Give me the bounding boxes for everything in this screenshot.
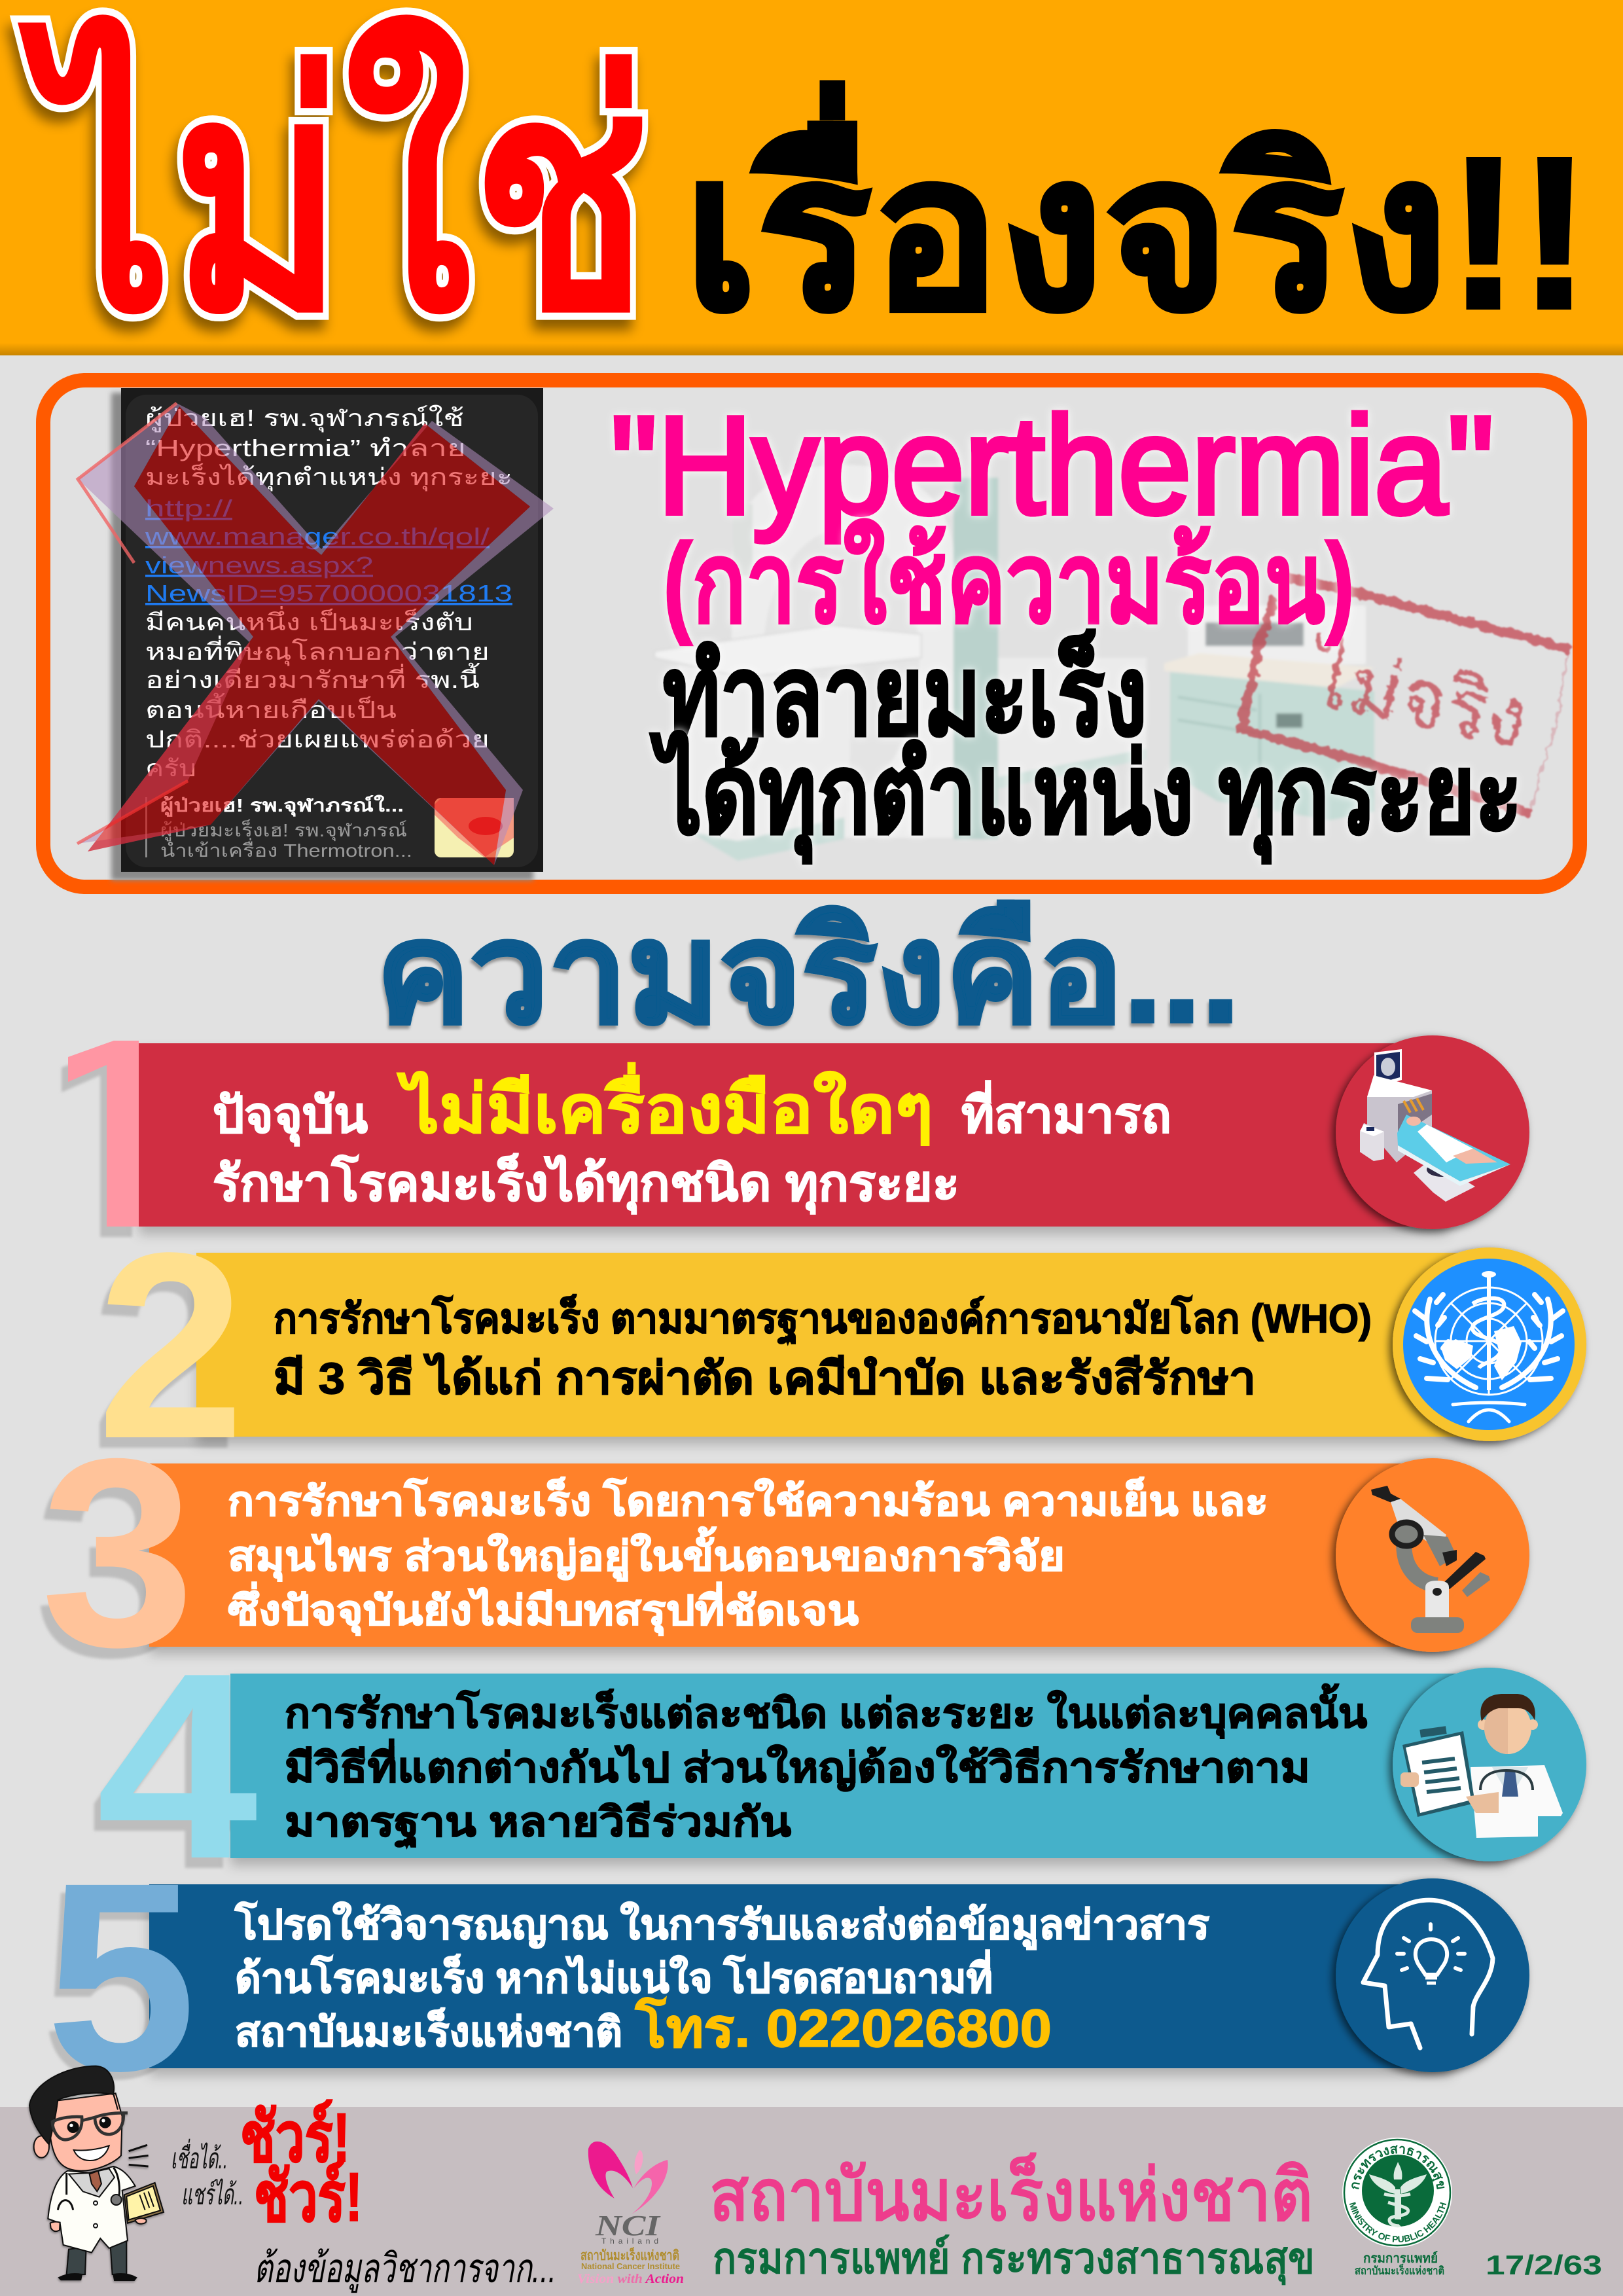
fact 1 text: ที่สามารถ: [961, 1080, 1171, 1143]
subhead: use of heat: (การใช้ความร้อน): [663, 519, 1355, 646]
title: true story: เรื่องจริง!!: [684, 82, 1590, 353]
icon: microscope: [1336, 1458, 1529, 1652]
caption: academic info from: ต้องข้อมูลวิชาการจาก...: [254, 2246, 556, 2293]
seal caption: สถาบันมะเร็งแห่งชาติ: [1355, 2263, 1444, 2277]
header band: [0, 0, 1623, 376]
phone screenshot of chat message: “Hyperthermia” ทำลาย: [145, 435, 466, 461]
fact 5 text: สถาบันมะเร็งแห่งชาติ: [235, 2007, 622, 2055]
icon: head with lightbulb: [1336, 1878, 1529, 2072]
phone screenshot of chat message: [111, 388, 543, 880]
logo: National Cancer Institute: NCI: [595, 2210, 661, 2242]
icon: doctor with clipboard: [1393, 1668, 1586, 1861]
faded photo: radiotherapy machine: [654, 465, 1374, 861]
number 5: 5: [46, 1827, 196, 2126]
caption: believable: เชื่อได้..: [171, 2138, 228, 2175]
fact 1: [39, 984, 1529, 1283]
fact 3 text: [228, 1477, 1268, 1636]
icon: MRI scanner: [1336, 1035, 1529, 1229]
fact 5: 5: [41, 1835, 191, 2134]
heading: the truth is: ความจริงคือ...: [376, 894, 1240, 1052]
seal caption: กรมการแพทย์: [1363, 2251, 1438, 2266]
fact 3: 3: [34, 1413, 188, 1713]
red stamp: not true: [1241, 579, 1567, 813]
phone screenshot of chat message: มีคนคนหนึ่ง เป็นมะเร็งตับ: [145, 606, 473, 636]
logo: Ministry of Public Health seal: MINISTRY OF PUBLIC HEALTH: [1349, 2202, 1446, 2242]
fact 5: [41, 1827, 1529, 2134]
fact 1 text: ไม่มีเครื่องมือใดๆ: [397, 1062, 933, 1147]
fact 4 text: มาตรฐาน หลายวิธีร่วมกัน: [285, 1800, 791, 1848]
phone screenshot of chat message: หมอที่พิษณุโลกบอกว่าตาย: [145, 636, 490, 666]
red X over screenshot: [77, 403, 554, 865]
phone screenshot of chat message: ผู้ป่วยมะเร็งเฮ! รพ.จุฬาภรณ์: [160, 819, 407, 842]
claim line 1: ทำลายมะเร็ง: [663, 630, 1147, 759]
fact 4: [90, 1617, 1586, 1924]
fact 2: [90, 1197, 1586, 1504]
icon: WHO emblem: [1393, 1247, 1586, 1441]
fact 4 text: การรักษาโรคมะเร็งแต่ละชนิด แต่ละระยะ ในแต่ละบุคคลนั้น: [285, 1683, 1367, 1738]
phone screenshot of chat message: มะเร็งได้ทุกตำแหน่ง ทุกระยะ: [145, 462, 512, 492]
fact 2 text: มี 3 วิธี ได้แก่ การผ่าตัด เคมีบำบัด และรังสีรักษา: [274, 1352, 1256, 1403]
caption: sure 2: ชัวร์!: [254, 2159, 363, 2236]
organization name: สถาบันมะเร็งแห่งชาติ: [709, 2152, 1313, 2236]
fact 3 text: การรักษาโรคมะเร็ง โดยการใช้ความร้อน ความเย็น และ: [228, 1477, 1268, 1524]
fact 3: [34, 1403, 1529, 1713]
fact 4 text: มีวิธีที่แตกต่างกันไป ส่วนใหญ่ต้องใช้วิธีการรักษาตาม: [285, 1739, 1310, 1791]
fact 1 text: [213, 1062, 1171, 1215]
headline: Hyperthermia: "Hyperthermia": [611, 387, 1494, 543]
logo: National Cancer Institute: Thailand: [601, 2236, 658, 2246]
logo: National Cancer Institute: National Cancer Institute: [581, 2262, 680, 2271]
phone screenshot of chat message: ปกติ....ช่วยเผยแพร่ต่อด้วย: [145, 726, 490, 753]
fact 3 text: สมุนไพร ส่วนใหญ่อยู่ในขั้นตอนของการวิจัย: [228, 1526, 1065, 1581]
phone screenshot of chat message: http://: [145, 495, 232, 522]
number 1: 1: [39, 984, 188, 1283]
phone screenshot of chat message: ครับ: [145, 755, 196, 781]
seal caption: [1355, 2251, 1444, 2277]
panel: false claim: [43, 380, 1580, 887]
fact 2 text: การรักษาโรคมะเร็ง ตามมาตรฐานขององค์การอนามัยโลก (WHO): [274, 1294, 1372, 1345]
fact 3 text: ซึ่งปัจจุบันยังไม่มีบทสรุปที่ชัดเจน: [228, 1582, 859, 1636]
phone screenshot of chat message: www.manager.co.th/qol/: [145, 523, 490, 550]
department and ministry: กรมการแพทย์ กระทรวงสาธารณสุข: [713, 2234, 1315, 2286]
fact 5 text: โปรดใช้วิจารณญาณ ในการรับและส่งต่อข้อมูลข่าวสาร: [234, 1901, 1209, 1950]
title: not: ไม่ใช่: [16, 12, 649, 376]
logo: National Cancer Institute: Vision with Action: [577, 2272, 684, 2286]
footer band: [0, 2066, 1623, 2296]
phone screenshot of chat message: ผู้ป่วยเฮ! รพ.จุฬาภรณ์ใช้: [145, 404, 464, 433]
logo: Ministry of Public Health seal: กระทรวงสาธารณสุข: [1351, 2145, 1445, 2189]
phone screenshot of chat message: viewnews.aspx?: [145, 552, 373, 579]
doctor mascot: [29, 2066, 164, 2280]
fact 1 text: ปัจจุบัน: [213, 1088, 368, 1147]
fact 1 text: รักษาโรคมะเร็งได้ทุกชนิด ทุกระยะ: [213, 1153, 959, 1215]
fact 4: 4: [90, 1628, 253, 1924]
fact 4 text: [285, 1683, 1367, 1848]
fact 5 text: [234, 1901, 1209, 2058]
fact 5 text: โทร. 022026800: [635, 1998, 1052, 2058]
red stamp: not true: ไม่จริง: [1296, 630, 1535, 766]
caption: sure 1: ชัวร์!: [240, 2100, 350, 2176]
phone screenshot of chat message: อย่างเดียวมารักษาที่ รพ.นี้: [145, 662, 480, 693]
number 3: 3: [41, 1403, 195, 1702]
phone screenshot of chat message: ผู้ป่วยเฮ! รพ.จุฬาภรณ์ใ...: [160, 795, 404, 817]
number 1: [68, 1041, 139, 1227]
logo: National Cancer Institute: [577, 2142, 684, 2286]
logo: Ministry of Public Health seal: [1342, 2138, 1452, 2248]
logo: National Cancer Institute: สถาบันมะเร็งแห่งชาติ: [580, 2246, 679, 2263]
number 4: 4: [96, 1617, 260, 1914]
fact 2 text: [274, 1294, 1372, 1403]
phone screenshot of chat message: นำเข้าเครื่อง Thermotron...: [160, 838, 412, 861]
phone screenshot of chat message: NewsID=9570000031813: [145, 580, 512, 607]
phone screenshot of chat message: ตอนนี้หายเกือบเป็น: [145, 692, 397, 723]
date: 17/2/63: [1486, 2250, 1602, 2280]
fact 5 text: ด้านโรคมะเร็ง หากไม่แน่ใจ โปรดสอบถามที่: [235, 1950, 993, 2001]
fact 2: 2: [90, 1208, 238, 1504]
caption: shareable: แชร์ได้..: [181, 2178, 243, 2211]
number 2: 2: [97, 1197, 245, 1494]
